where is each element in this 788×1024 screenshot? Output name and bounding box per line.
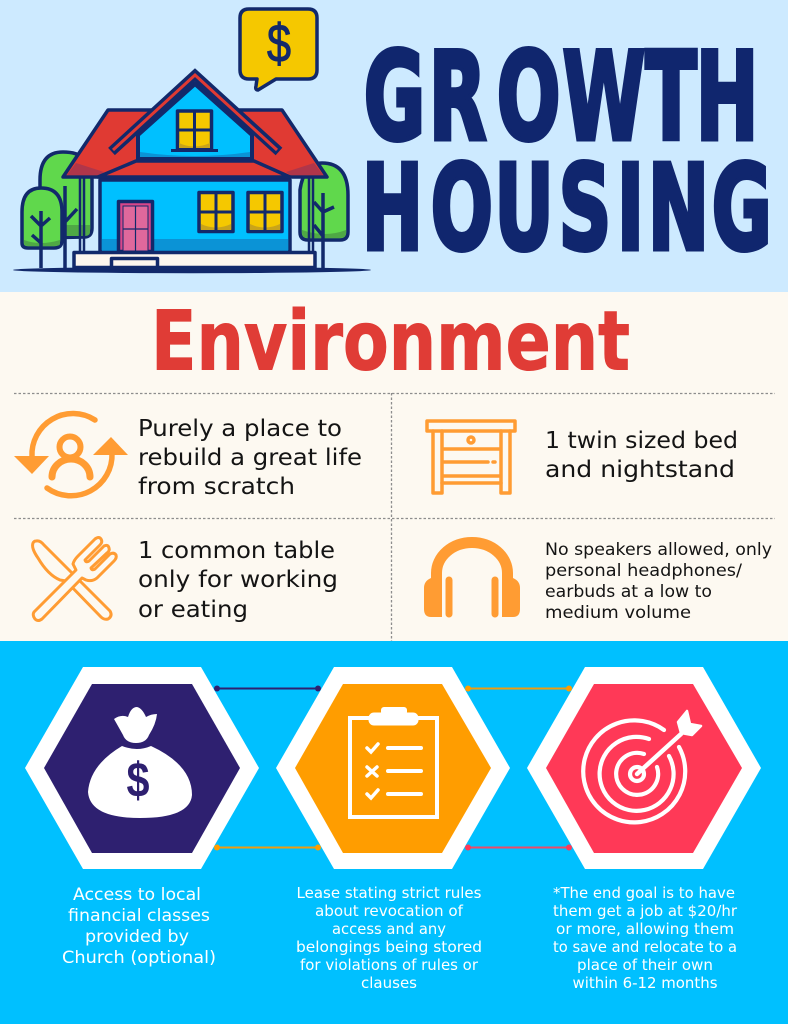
foundation and step (74, 252, 315, 268)
panel: benefits (0, 641, 788, 1024)
caption: financial classes (62, 885, 216, 967)
title (362, 27, 772, 278)
caption: financial classes: Access to local (73, 885, 201, 904)
item: nightstand (427, 421, 738, 493)
icon: headphones (424, 542, 520, 617)
back left tree (40, 152, 92, 268)
text: headphones: medium volume (545, 603, 691, 622)
text: nightstand: 1 twin sized bed (545, 426, 738, 454)
text: rebuild: rebuild a great life (138, 443, 362, 471)
heading: Environment: Environment (151, 294, 630, 390)
text: headphones (545, 540, 772, 622)
caption: end goal: to save and relocate to a (553, 939, 737, 956)
text: headphones: No speakers allowed, only (545, 540, 772, 559)
text: nightstand: and nightstand (545, 455, 735, 483)
text: rebuild (138, 414, 362, 500)
hexagon: clipboard (276, 667, 510, 869)
icon: house illustration (13, 9, 371, 273)
icon: nightstand (427, 421, 515, 493)
title: GROWTH (364, 27, 759, 168)
text: rebuild: Purely a place to (138, 414, 342, 442)
caption: end goal: within 6-12 months (572, 975, 718, 992)
caption: financial classes: Church (optional) (62, 948, 216, 967)
lower roof (98, 161, 290, 177)
caption: lease rules: about revocation of (315, 903, 464, 920)
text: headphones: earbuds at a low to (545, 582, 712, 601)
text: common table: or eating (138, 595, 248, 623)
caption: lease rules (296, 885, 482, 992)
icon: target (583, 711, 701, 822)
title: HOUSING (362, 141, 772, 278)
gable roof bars (112, 75, 279, 152)
caption: end goal (553, 885, 738, 992)
text: headphones: personal headphones/ (545, 561, 742, 580)
caption: financial classes: financial classes (68, 906, 210, 925)
icon: money bag (88, 707, 192, 818)
icon: dollar speech bubble: $ (267, 14, 291, 74)
caption: lease rules: belongings being stored (296, 939, 482, 956)
panel: header (0, 0, 788, 292)
caption: lease rules: Lease stating strict rules (296, 885, 482, 902)
caption: lease rules: for violations of rules or (300, 957, 479, 974)
icon: clipboard (350, 707, 437, 817)
front left tree (22, 188, 62, 268)
caption: lease rules: clauses (361, 975, 417, 992)
text: common table (138, 536, 338, 623)
text: rebuild: from scratch (138, 472, 295, 500)
main roof (63, 110, 327, 177)
caption: end goal: place of their own (577, 957, 713, 974)
caption: financial classes: provided by (85, 927, 189, 946)
connectors (214, 686, 572, 850)
icon: money bag: $ (126, 754, 150, 808)
door (118, 202, 152, 252)
gable wall (138, 84, 252, 159)
house wall (100, 180, 290, 252)
left window (199, 192, 233, 232)
panel: environment (0, 292, 788, 641)
right tree (300, 163, 348, 268)
text: common table: 1 common table (138, 536, 335, 564)
caption: end goal: or more, allowing them (556, 921, 734, 938)
caption: end goal: them get a job at $20/hr (553, 903, 738, 920)
hexagon: target (527, 667, 761, 869)
ground shadow (13, 267, 371, 273)
icon: dollar speech bubble (240, 9, 317, 90)
icon: knife and fork (33, 538, 116, 620)
text: common table: only for working (138, 565, 338, 593)
caption: lease rules: access and any (332, 921, 446, 938)
icon: person cycle (14, 414, 128, 496)
hexagon: money bag (25, 667, 259, 869)
porch columns (80, 178, 313, 252)
item: common table (33, 536, 338, 623)
right window (248, 192, 282, 232)
caption: end goal: *The end goal is to have (553, 885, 735, 902)
item: rebuild (14, 414, 362, 500)
item: headphones (424, 540, 772, 622)
gable window (171, 111, 218, 150)
text: nightstand (545, 426, 738, 483)
